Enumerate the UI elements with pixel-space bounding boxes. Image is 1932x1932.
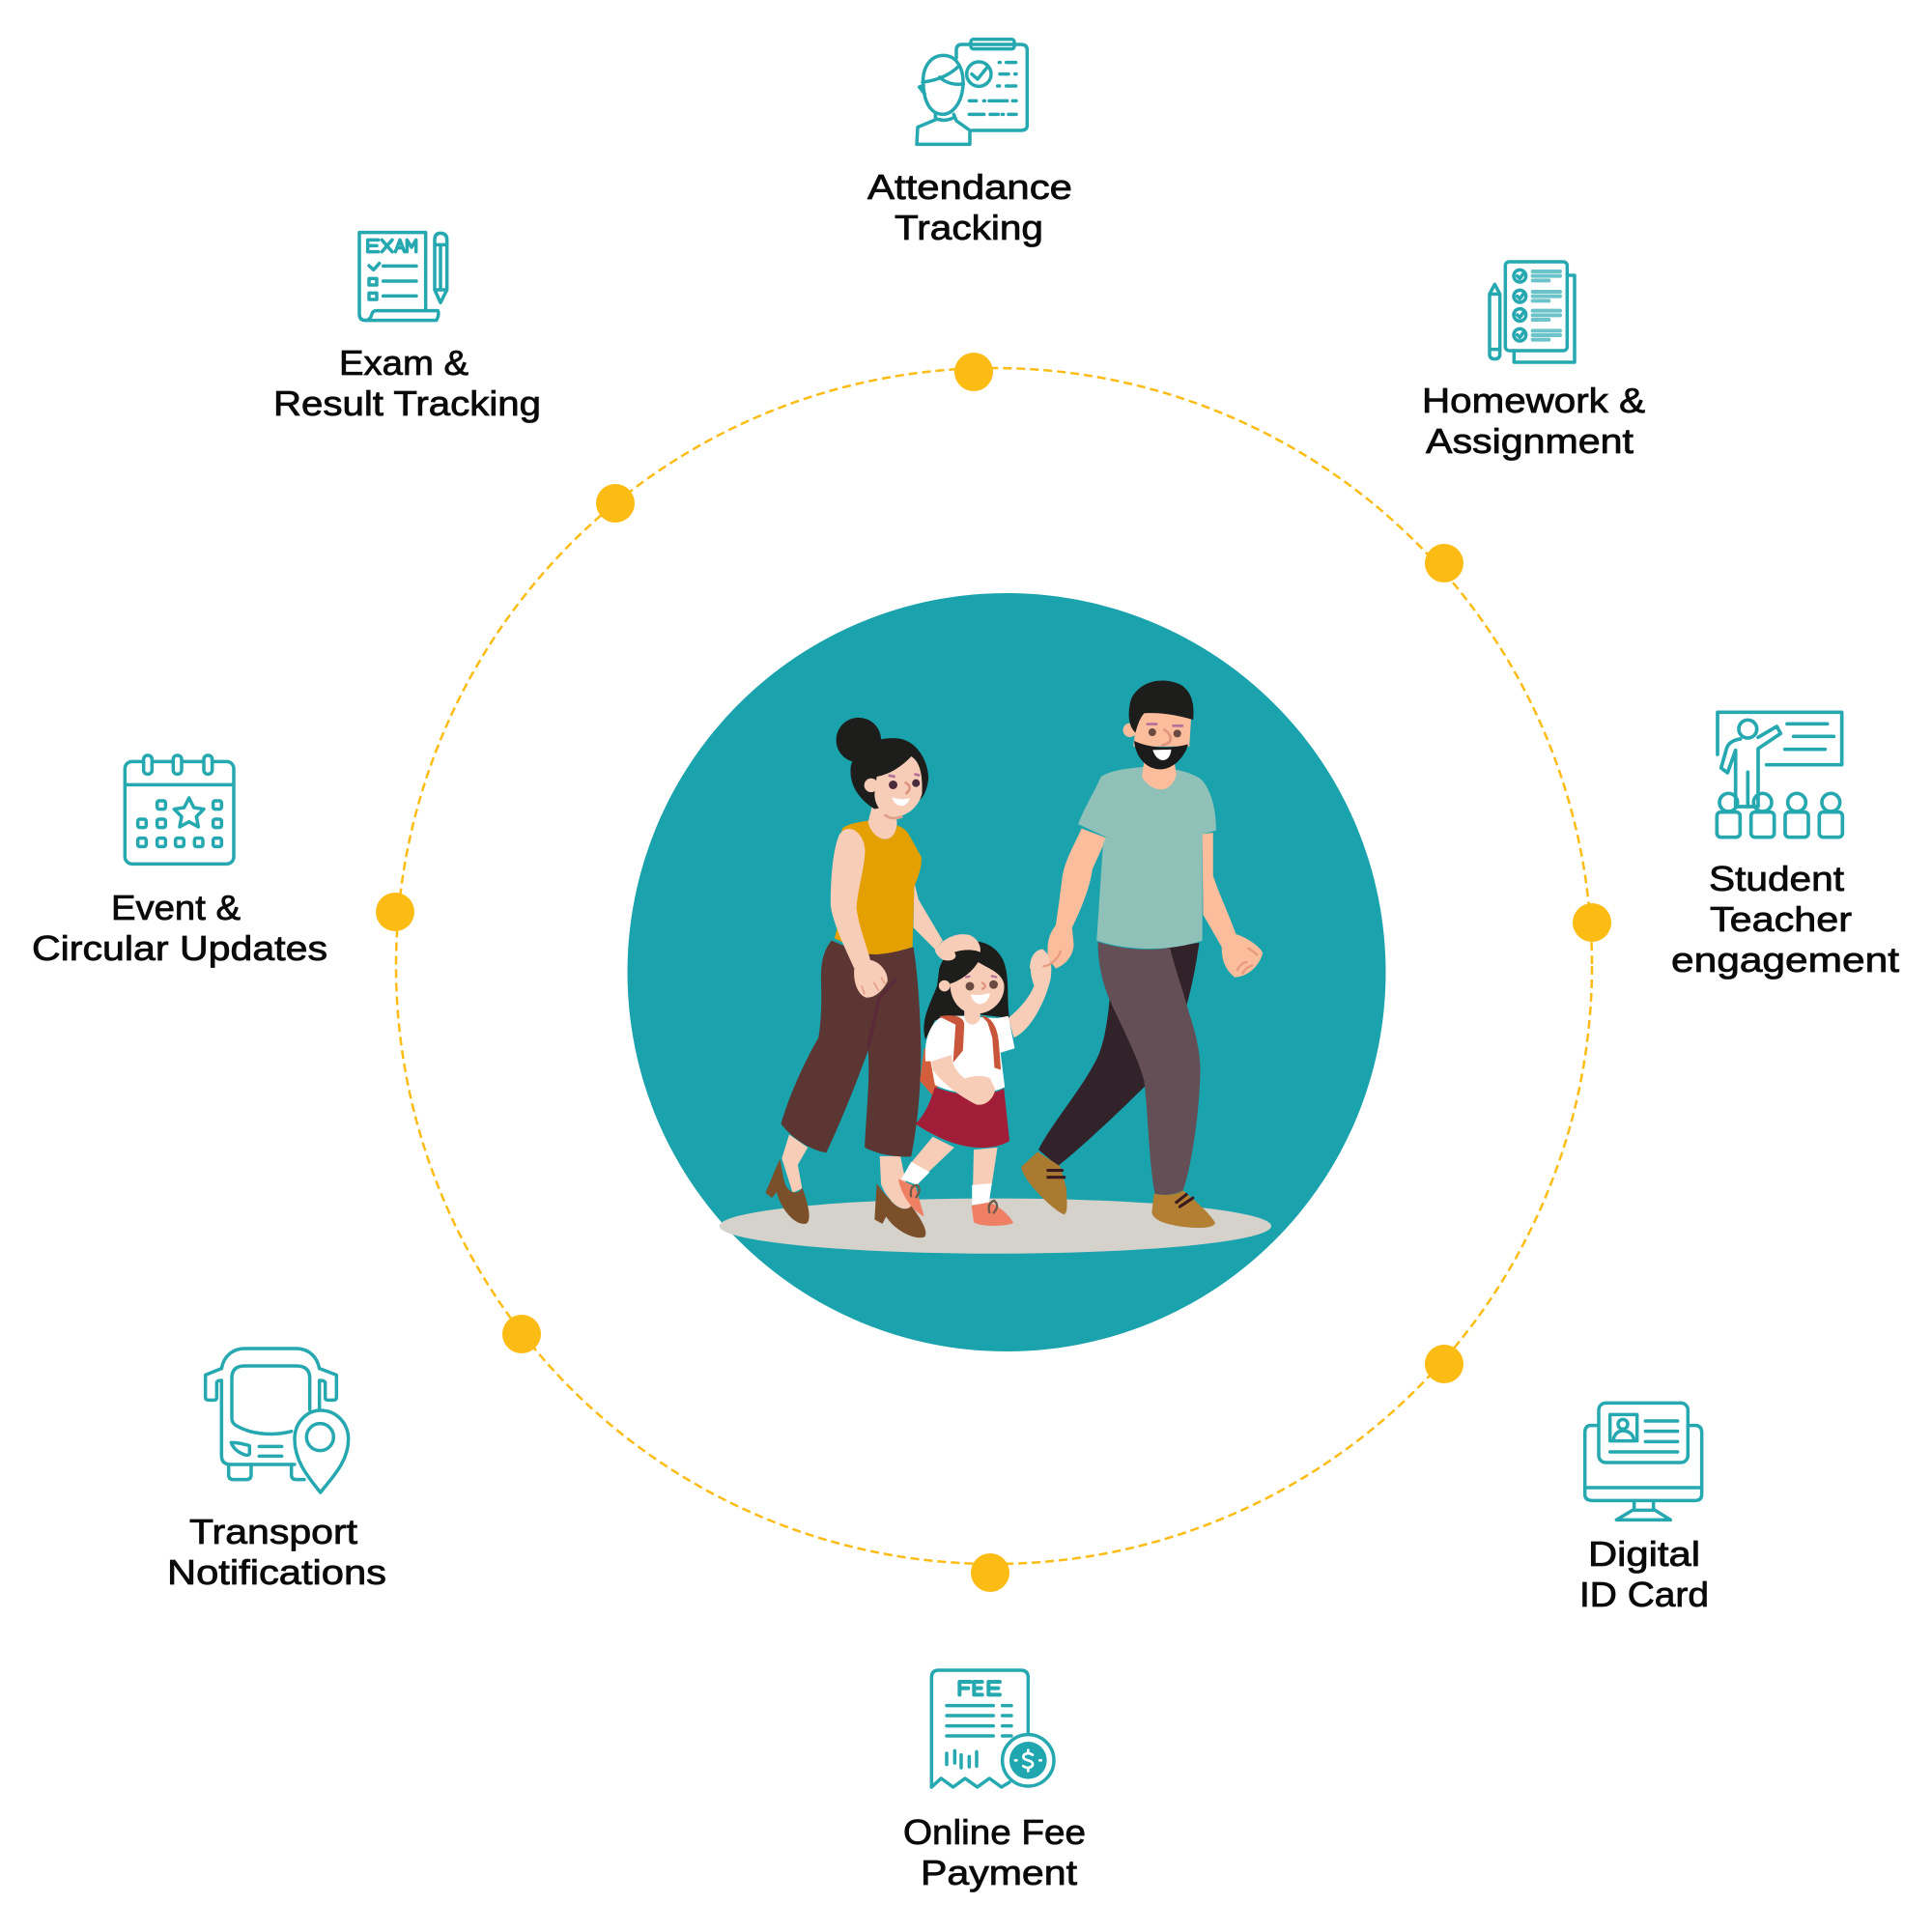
label: Online Fee: [903, 1812, 1086, 1852]
icon: bus with location pin: [206, 1349, 349, 1492]
label: Exam &: [339, 343, 469, 383]
item: Online Fee Payment: [903, 1670, 1086, 1892]
item: Student Teacher engagement: [1671, 712, 1899, 980]
item: Digital ID Card: [1579, 1403, 1709, 1614]
item: Event & Circular Updates: [32, 755, 327, 968]
label: Result Tracking: [273, 384, 541, 423]
icon: exam sheet: [359, 233, 447, 321]
icon: ID card on monitor: [1585, 1403, 1702, 1520]
icon: homework checklist: [1490, 262, 1575, 362]
item: Homework & Assignment: [1422, 262, 1645, 461]
item: Attendance Tracking: [867, 40, 1072, 247]
central teal circle: [628, 593, 1385, 1351]
item: Transport Notifications: [167, 1349, 386, 1592]
label: Homework &: [1422, 381, 1645, 420]
label: Notifications: [167, 1552, 386, 1592]
icon: teacher and students: [1717, 712, 1842, 838]
label: Assignment: [1426, 421, 1634, 461]
label: engagement: [1671, 940, 1899, 980]
icon: fee receipt with coin: [931, 1670, 1054, 1787]
label: Digital: [1588, 1534, 1700, 1574]
girl: [898, 941, 1051, 1226]
man: [1021, 681, 1263, 1228]
ground ellipse: [720, 1199, 1271, 1254]
label: Transport: [189, 1512, 357, 1551]
label: Payment: [921, 1853, 1077, 1892]
label: Student: [1709, 859, 1844, 898]
icon: calendar with star: [125, 755, 234, 864]
label: Teacher: [1710, 899, 1852, 939]
dashed ring with dots: [376, 353, 1611, 1592]
woman's hand on girl's head: [935, 934, 980, 960]
woman: [765, 718, 943, 1237]
label: Circular Updates: [32, 928, 327, 968]
label: Event &: [111, 888, 241, 927]
item: Exam & Result Tracking: [273, 233, 541, 423]
icon: attendance clipboard: [917, 40, 1027, 144]
family illustration: [720, 681, 1271, 1254]
label: Attendance: [867, 167, 1072, 207]
label: ID Card: [1579, 1575, 1709, 1614]
label: Tracking: [895, 208, 1043, 247]
